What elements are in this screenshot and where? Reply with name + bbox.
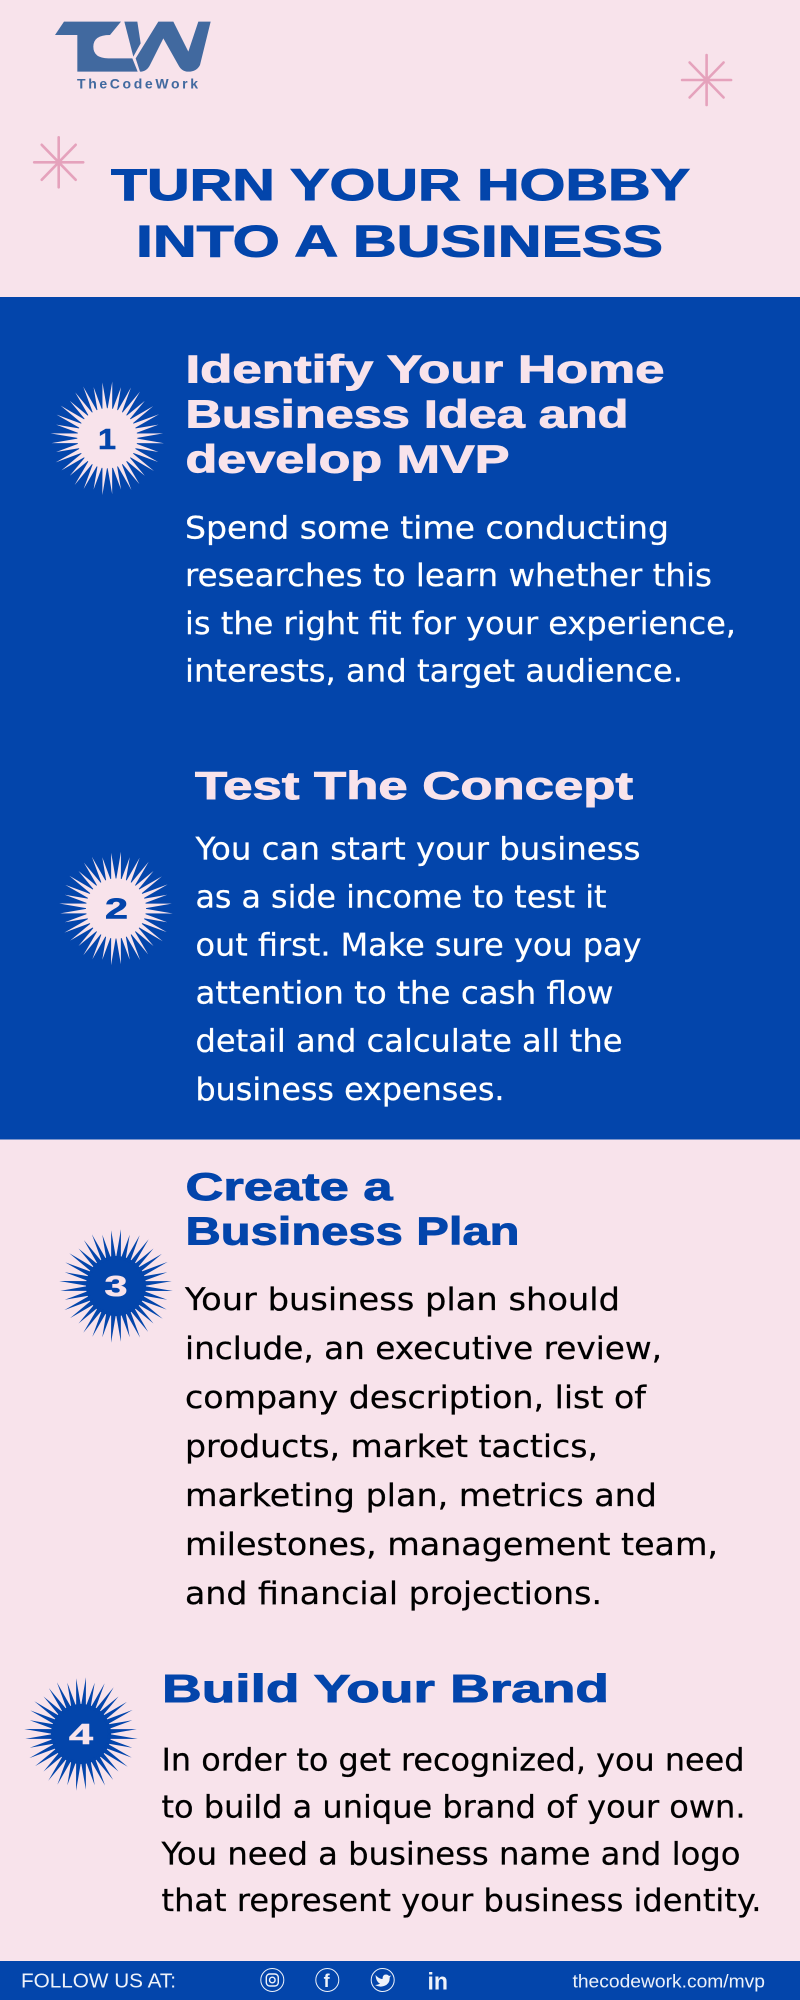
text: step 3 body: products, market tactics, bbox=[185, 1429, 598, 1465]
text: step 3 body bbox=[184, 1282, 718, 1612]
heading: step 4: Build Your Brand bbox=[162, 1668, 609, 1711]
text: step 1 body: interests, and target audience. bbox=[185, 654, 683, 690]
step 1 bbox=[42, 348, 736, 690]
text: step 3 body: company description, list of bbox=[185, 1380, 647, 1416]
text: step 1 body bbox=[185, 510, 736, 690]
icon: facebook: f bbox=[324, 1971, 331, 1991]
icon: linkedin: in bbox=[428, 1968, 448, 1995]
text: step 2 body: attention to the cash flow bbox=[196, 975, 614, 1011]
text: step 4 body: to build a unique brand of your own. bbox=[162, 1790, 746, 1826]
title bbox=[111, 161, 690, 267]
icon: burst number 4: 4 bbox=[69, 1719, 93, 1751]
logo: TheCodeWork: TheCodeWork bbox=[77, 76, 198, 92]
text: step 2 body bbox=[194, 831, 642, 1108]
text: step 3 body: Your business plan should bbox=[184, 1282, 620, 1318]
text: step 1 body: is the right fit for your experience, bbox=[185, 606, 736, 642]
text: step 4 body: In order to get recognized, you need bbox=[162, 1743, 745, 1779]
text: step 2 body: business expenses. bbox=[196, 1072, 504, 1108]
decorative star: left of title bbox=[34, 137, 83, 187]
step 2 bbox=[51, 765, 641, 1108]
heading: step 1: develop MVP bbox=[186, 439, 510, 482]
icon: burst number 2 bbox=[51, 843, 181, 974]
text: step 1 body: Spend some time conducting bbox=[185, 510, 669, 546]
decorative star: top right bbox=[682, 55, 731, 105]
heading: step 2: Test The Concept bbox=[195, 765, 633, 808]
text: step 1 body: researches to learn whether this bbox=[185, 558, 712, 594]
step 4 bbox=[16, 1668, 761, 1919]
heading: step 1 bbox=[186, 348, 664, 482]
icon: burst number 3: 3 bbox=[104, 1271, 128, 1303]
text: follow us: FOLLOW US AT: bbox=[21, 1970, 176, 1992]
heading: step 1: Identify Your Home bbox=[186, 348, 664, 391]
step 3 bbox=[51, 1166, 718, 1612]
icon: burst number 4 bbox=[16, 1669, 146, 1799]
text: website: thecodework.com/mvp bbox=[572, 1972, 765, 1992]
logo: TheCodeWork bbox=[55, 22, 211, 92]
text: step 4 body: You need a business name and logo bbox=[160, 1836, 741, 1872]
icon: burst number 1: 1 bbox=[98, 424, 116, 456]
title: TURN YOUR HOBBY bbox=[111, 161, 690, 210]
icon: burst number 3 bbox=[51, 1221, 181, 1351]
text: step 4 body: that represent your business identity. bbox=[162, 1883, 762, 1919]
heading: step 3: Business Plan bbox=[186, 1210, 520, 1253]
title: INTO A BUSINESS bbox=[136, 218, 663, 267]
text: step 4 body bbox=[160, 1743, 762, 1919]
footer bar bbox=[0, 1961, 800, 2000]
icon: instagram bbox=[261, 1968, 284, 1992]
icon: burst number 1 bbox=[42, 373, 172, 503]
icon: twitter bbox=[371, 1968, 394, 1992]
text: step 2 body: as a side income to test it bbox=[196, 879, 606, 915]
heading: step 1: Business Idea and bbox=[186, 394, 628, 437]
text: step 3 body: and financial projections. bbox=[185, 1576, 602, 1612]
text: step 2 body: detail and calculate all the bbox=[196, 1024, 622, 1060]
panel: blue band for steps 1 and 2 bbox=[0, 297, 800, 1140]
text: step 2 body: out first. Make sure you pay bbox=[196, 927, 642, 963]
heading: step 3 bbox=[186, 1166, 520, 1253]
text: step 3 body: marketing plan, metrics and bbox=[185, 1478, 657, 1514]
text: step 3 body: milestones, management team, bbox=[185, 1527, 718, 1563]
icon: burst number 2: 2 bbox=[105, 894, 128, 926]
text: step 2 body: You can start your business bbox=[194, 831, 640, 867]
icon: facebook bbox=[316, 1968, 339, 1992]
heading: step 3: Create a bbox=[186, 1166, 393, 1209]
text: step 3 body: include, an executive review, bbox=[185, 1331, 662, 1367]
